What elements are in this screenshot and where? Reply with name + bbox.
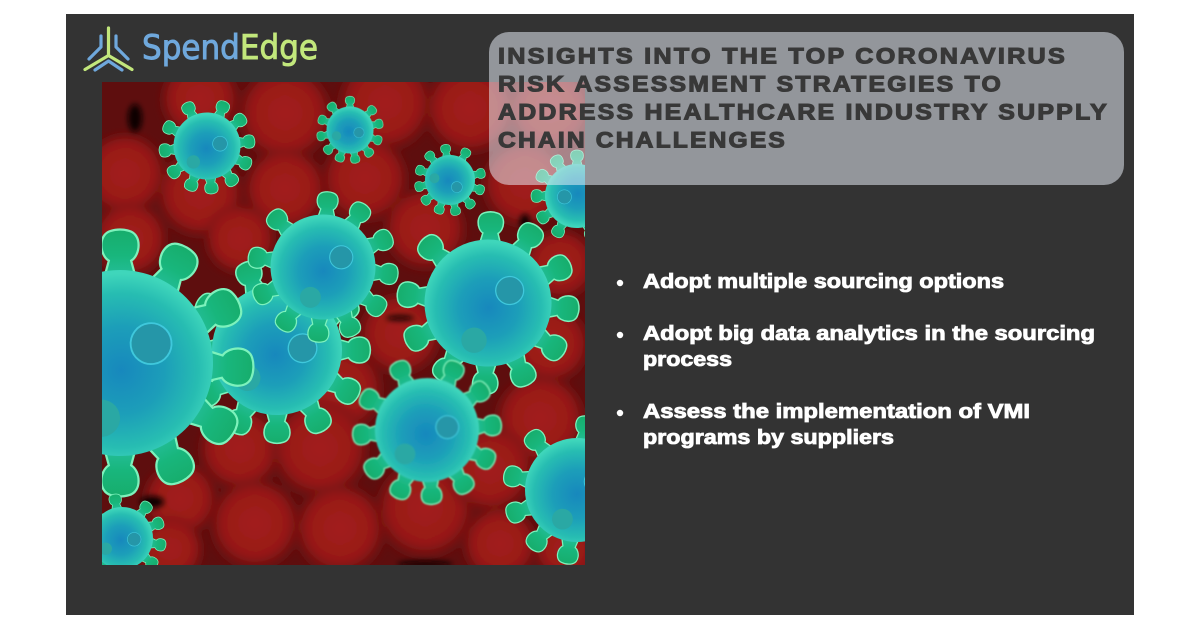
title text: INSIGHTS INTO THE TOP CORONAVIRUS [498, 44, 1067, 68]
title text: ADDRESS HEALTHCARE INDUSTRY SUPPLY [498, 100, 1109, 124]
bullet 3: programs by suppliers [643, 426, 894, 449]
clipped virus bottom right [502, 415, 585, 565]
bullet 1: Adopt multiple sourcing options [643, 270, 1004, 293]
small virus bottom left [102, 494, 166, 565]
small virus top centre [316, 96, 384, 164]
title text: RISK ASSESSMENT STRATEGIES TO [498, 72, 1003, 96]
logo icon [85, 28, 132, 70]
dark gaps between cells [128, 104, 530, 567]
clipped virus top right [530, 150, 585, 238]
medium virus top of cluster [248, 191, 399, 343]
medium virus behind large virus [194, 260, 372, 444]
logo wordmark: SpendEdge [142, 28, 318, 68]
red blood cell texture [102, 82, 585, 565]
small virus right of centre [414, 144, 486, 216]
small virus top left [158, 100, 256, 194]
photo: teal coronavirus particles among red blood cells [102, 82, 585, 565]
title text: CHAIN CHALLENGES [498, 128, 787, 152]
bullet 3 [617, 400, 1030, 449]
bullet 2: Adopt big data analytics in the sourcing [643, 322, 1095, 345]
large virus right [396, 211, 580, 394]
bullet list [617, 270, 1095, 449]
title callout [489, 32, 1124, 185]
blurred virus lower centre [350, 358, 504, 506]
bullet 2: process [643, 348, 732, 371]
title text [498, 44, 1109, 152]
bullet 3: Assess the implementation of VMI [643, 400, 1030, 423]
large virus left [102, 228, 254, 498]
translucent rounded panel [489, 32, 1124, 185]
bullet 2 [617, 322, 1095, 371]
logo: SpendEdge [85, 28, 318, 70]
